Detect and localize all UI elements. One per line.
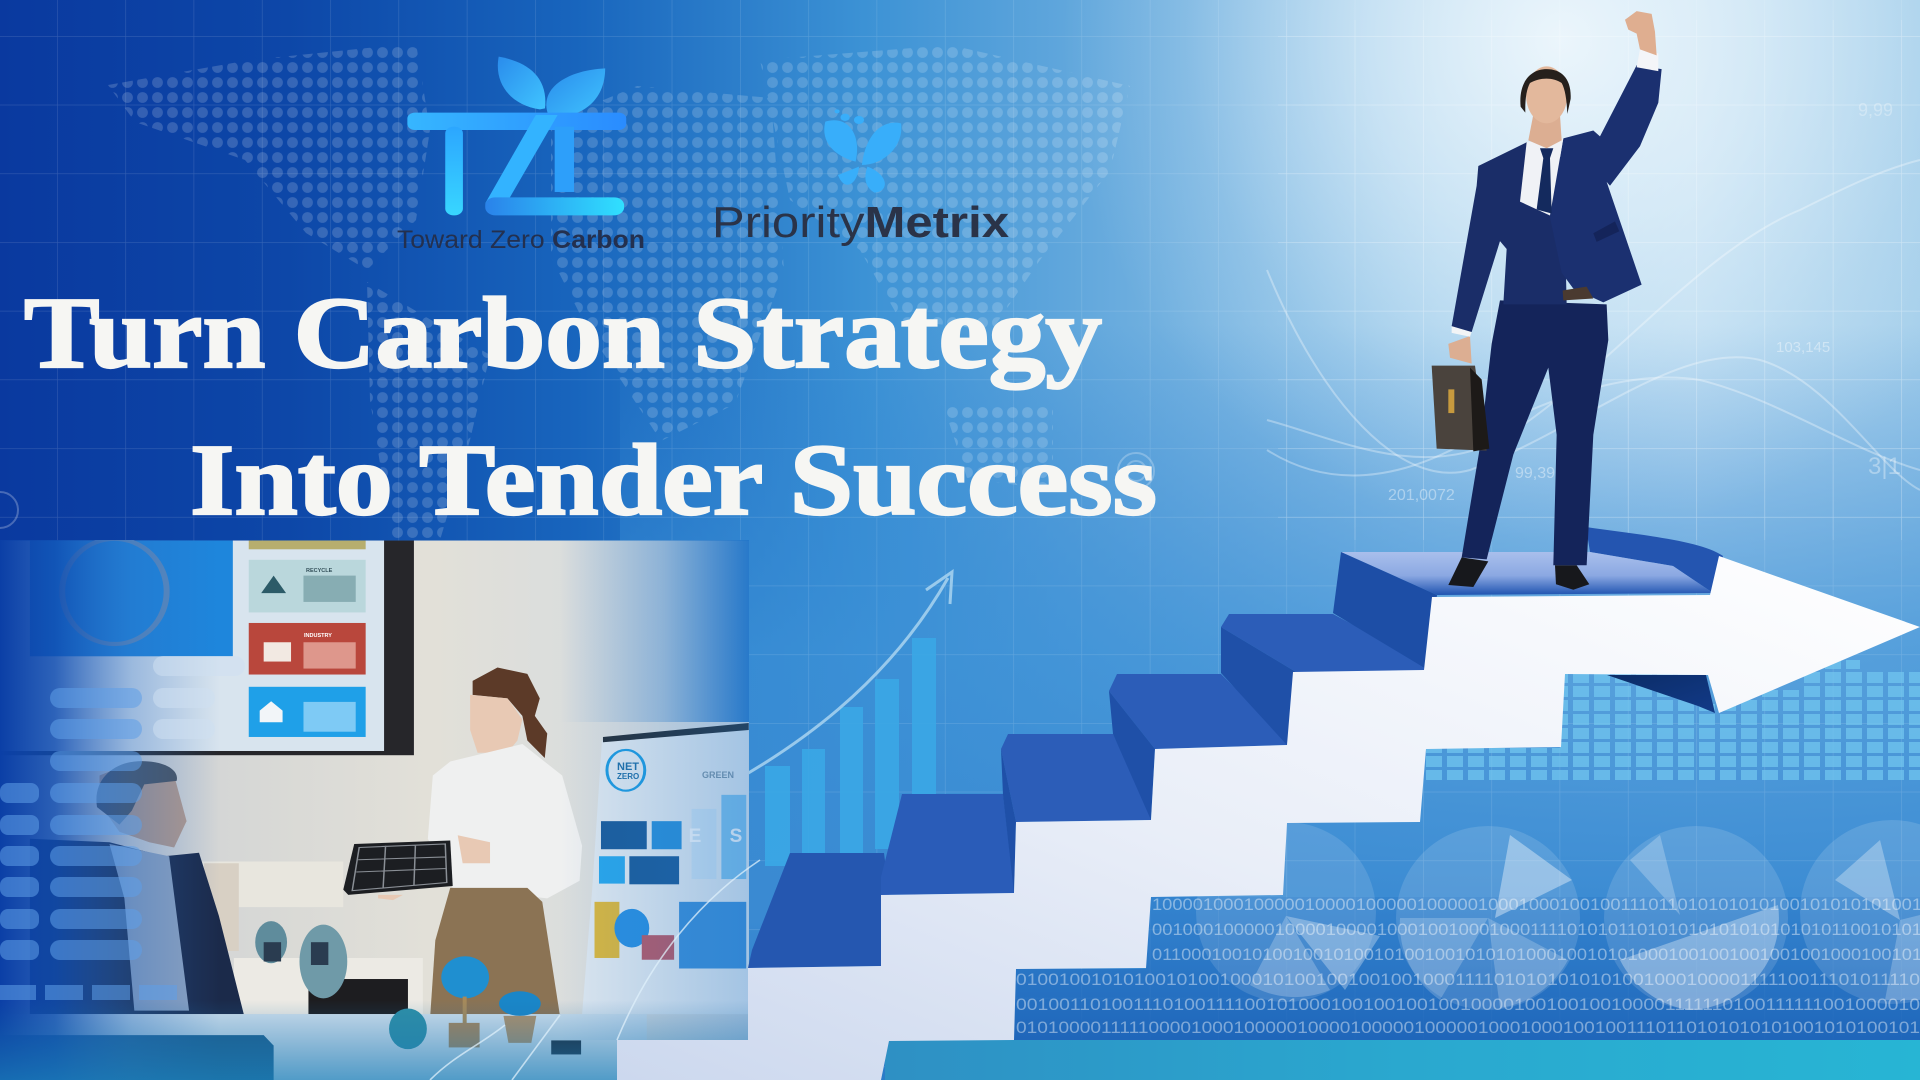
step 4 — [1109, 674, 1287, 749]
data grid cells — [1426, 660, 1920, 780]
jacket left — [1452, 142, 1567, 332]
seated man — [30, 761, 244, 1014]
desk — [62, 1014, 646, 1076]
chart value: 201,0072: 201,0072 — [1388, 487, 1455, 504]
Z base — [485, 197, 624, 215]
top tread — [1341, 552, 1713, 595]
left blue fade over photo — [0, 540, 220, 1080]
photo: office presentation — [0, 539, 781, 1080]
businessman figure — [1432, 11, 1662, 590]
step 5 — [1221, 614, 1428, 672]
step 4 riser — [1109, 691, 1155, 820]
butterfly icon — [824, 109, 901, 193]
pie 1 — [1196, 822, 1380, 1002]
binary data panel — [1014, 895, 1920, 1040]
right blue fade above board — [560, 540, 749, 722]
jacket pocket — [1593, 221, 1619, 242]
top riser — [1333, 552, 1437, 670]
step 3 riser — [1001, 749, 1016, 893]
Toward Zero Carbon wordmark: Toward Zero Carbon — [397, 226, 645, 254]
E label: E — [689, 826, 701, 847]
chart value: 103,145: 103,145 — [1776, 339, 1830, 356]
wall — [16, 540, 749, 1040]
chart value: 9,99: 9,99 — [1858, 100, 1893, 120]
laptop foreground — [0, 1035, 274, 1080]
bars — [765, 638, 936, 866]
hair — [1520, 69, 1571, 114]
jacket right and arm — [1550, 65, 1662, 302]
tablet — [343, 840, 453, 900]
RECYCLE label: RECYCLE — [306, 568, 333, 574]
step 3 — [1001, 734, 1151, 822]
thin accent lines — [430, 860, 760, 1080]
left hand — [1448, 336, 1472, 364]
shelf — [199, 862, 423, 1014]
upper right chart grid — [1278, 20, 1920, 540]
blue treads and risers — [748, 527, 1723, 1080]
pie 4 — [1800, 820, 1920, 1004]
binary text rows — [1016, 895, 1920, 1037]
step 5 riser — [1221, 627, 1296, 745]
title line 1: Turn Carbon Strategy — [24, 277, 1102, 390]
arrow notch shadow — [1607, 675, 1715, 713]
title — [24, 277, 1157, 537]
Z diagonal — [485, 115, 558, 203]
shirt cuff — [1637, 49, 1658, 71]
presenting woman — [343, 668, 582, 1014]
bar chart with growth arrow — [690, 572, 952, 866]
INDUSTRY label: INDUSTRY — [304, 633, 332, 639]
binary text rows: 01001001010100101001000101001001001001000111101010101010100100010000111110011101011110 — [1016, 970, 1920, 989]
line chart decoration — [1267, 100, 1920, 504]
S label: S — [730, 826, 742, 847]
photo labels — [304, 568, 742, 847]
growth arrow — [690, 572, 952, 805]
left cuff — [1452, 326, 1472, 337]
briefcase — [1432, 366, 1489, 451]
GREEN label: GREEN — [702, 770, 734, 780]
logo: PriorityMetrix — [712, 109, 1010, 247]
bottom fade over photo — [0, 1000, 749, 1080]
tie — [1537, 148, 1553, 213]
PriorityMetrix wordmark: Priority Metrix — [712, 198, 1010, 247]
small plants — [255, 921, 347, 998]
pie chart decorations — [1196, 820, 1920, 1010]
right blue tint over board — [560, 722, 749, 1040]
decorative target circles — [0, 453, 1154, 528]
binary text rows: 0010001000001000010000100010010001000111101010110101010101010101010110010101 — [1152, 920, 1920, 939]
chart value: 3|1: 3|1 — [1868, 453, 1901, 480]
T bar — [407, 113, 626, 130]
trousers — [1462, 300, 1608, 565]
NET ZERO label: NET — [617, 761, 639, 773]
top back ridge — [1586, 527, 1723, 593]
chart value: 99,39: 99,39 — [1515, 465, 1555, 482]
raised fist — [1625, 11, 1657, 55]
white stair and arrow — [617, 556, 1920, 1080]
step 1 — [748, 853, 890, 968]
belt — [1563, 287, 1593, 300]
shirt — [1520, 138, 1563, 215]
neck — [1528, 115, 1562, 148]
bottom teal floor band — [885, 1040, 1920, 1080]
lower left base — [881, 1041, 889, 1080]
pie 2 — [1396, 826, 1580, 1010]
pie 3 — [1604, 826, 1788, 1010]
step 2 — [881, 794, 1014, 895]
binary text rows: 1000010001000001000010000010000010001000100100111011010101010100101010101001 — [1152, 895, 1920, 914]
ZERO label: ZERO — [617, 772, 639, 781]
T stem — [445, 127, 463, 215]
C stem — [555, 127, 574, 192]
overlay data bars — [0, 656, 245, 1000]
staircase with arrow — [617, 527, 1920, 1080]
desk models: plants and globe — [389, 956, 581, 1054]
logo: Toward Zero Carbon — [397, 57, 645, 254]
binary text rows: 0110001001010010010100101001001010101000100101010001001001001001001000100101 — [1152, 945, 1920, 964]
binary text rows: 01010000111110000100010000010000100000100000100010001001001110110101010101001010100101 — [1016, 1018, 1920, 1037]
wall television — [0, 539, 414, 755]
dotted world map — [108, 43, 1130, 540]
title line 2: Into Tender Success — [190, 424, 1157, 537]
face — [1526, 66, 1567, 123]
logo leaves — [498, 57, 605, 117]
binary text rows: 00100110100111010011110010100010010010010010000100100100100001111110100111111001000010 — [1016, 995, 1920, 1014]
shoes — [1448, 557, 1589, 590]
flipchart board — [582, 723, 749, 1014]
